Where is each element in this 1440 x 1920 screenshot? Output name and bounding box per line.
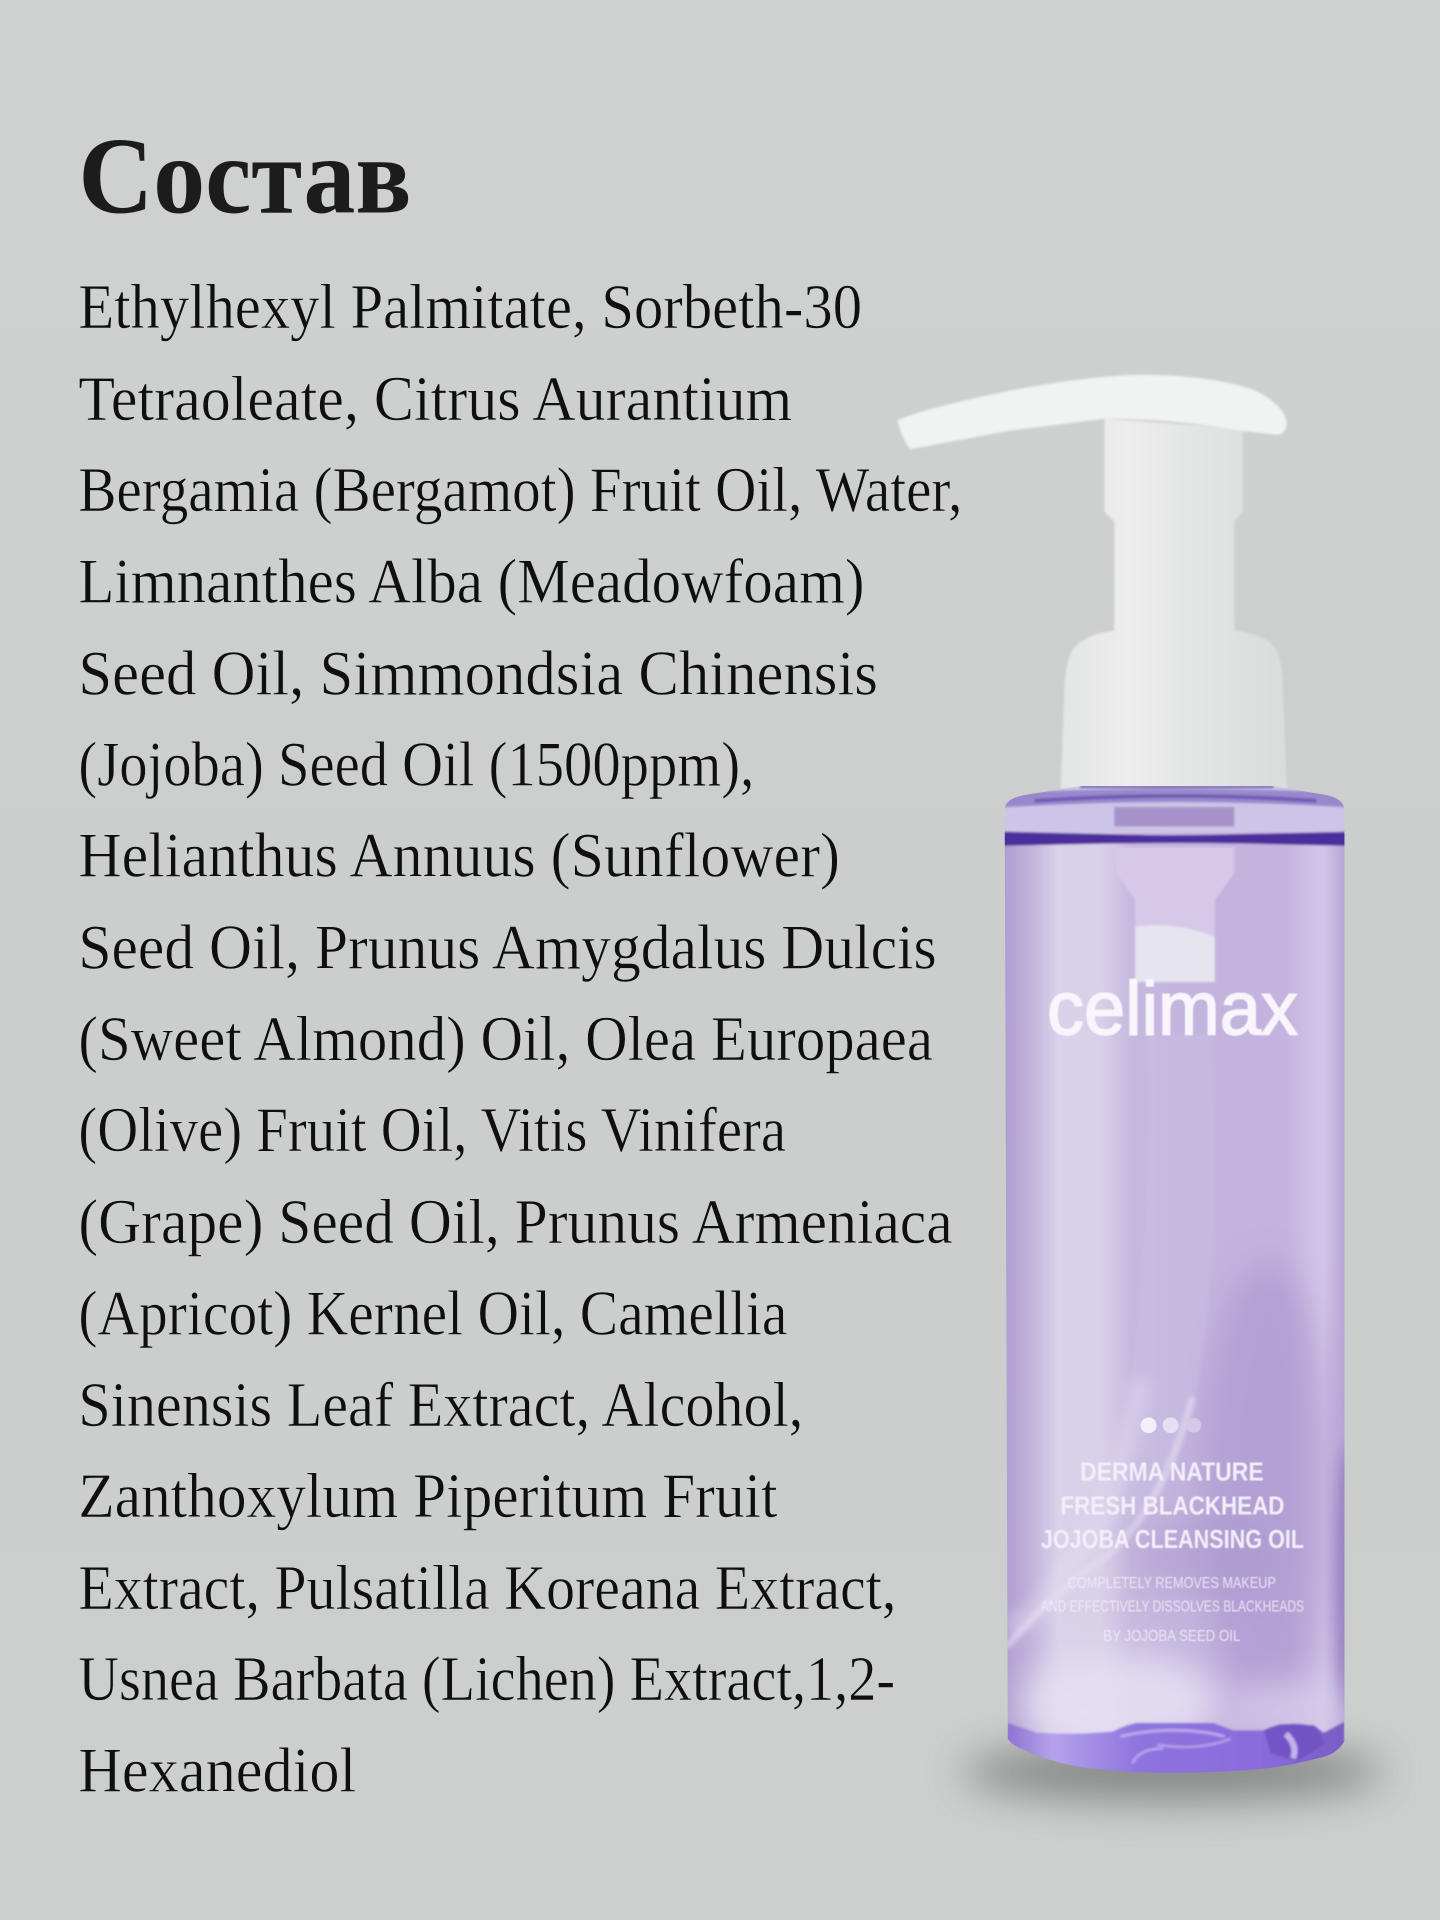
ingredients text block: (Olive) Fruit Oil, Vitis Vinifera: [78, 1094, 786, 1165]
base liquid: [1002, 1722, 1344, 1776]
label: product description: COMPLETELY REMOVES MAKEUP: [1068, 1575, 1276, 1592]
dark neck line: [992, 831, 1359, 846]
ingredients text block: Usnea Barbata (Lichen) Extract,1,2-: [78, 1643, 895, 1714]
label: product description: AND EFFECTIVELY DISSOLVES BLACKHEADS: [1041, 1598, 1304, 1615]
ingredients text block: (Apricot) Kernel Oil, Camellia: [78, 1278, 787, 1349]
label: product name: FRESH BLACKHEAD: [1060, 1493, 1284, 1521]
ingredients text block: Zanthoxylum Piperitum Fruit: [78, 1460, 778, 1531]
title: Состав: [78, 115, 411, 236]
pump head: [898, 375, 1287, 789]
dip tube inside the liquid: [1065, 1035, 1214, 1549]
dip tube collar: [1114, 847, 1234, 982]
label: product description: BY JOJOBA SEED OIL: [1103, 1628, 1241, 1645]
ingredients text block: (Sweet Almond) Oil, Olea Europaea: [78, 1003, 933, 1074]
label: product description: [1041, 1575, 1304, 1645]
lower body shading: [1200, 1261, 1335, 1727]
ingredients text block: Ethylhexyl Palmitate, Sorbeth-30: [78, 271, 862, 342]
ingredients text block: Hexanediol: [78, 1734, 356, 1805]
ingredients text block: Seed Oil, Simmondsia Chinensis: [78, 637, 878, 708]
ingredients text block: Helianthus Annuus (Sunflower): [78, 820, 840, 891]
ingredients text block: (Jojoba) Seed Oil (1500ppm),: [78, 729, 754, 800]
label: celimax logo: celimax: [1047, 967, 1298, 1052]
ingredients text block: Tetraoleate, Citrus Aurantium: [78, 363, 792, 434]
bottle shadow: [962, 1742, 1384, 1801]
label: product name: DERMA NATURE: [1080, 1458, 1264, 1486]
label: three dots: [1141, 1417, 1201, 1433]
ingredients text block: Limnanthes Alba (Meadowfoam): [78, 545, 864, 616]
ingredients text block: Extract, Pulsatilla Koreana Extract,: [78, 1552, 896, 1623]
label: product name: [1041, 1458, 1304, 1554]
ingredients text block: [78, 271, 962, 1805]
shoulder band: [1004, 786, 1344, 834]
label: product name: JOJOBA CLEANSING OIL: [1041, 1526, 1304, 1554]
liquid swirl: [1007, 1397, 1193, 1647]
ingredients text block: Bergamia (Bergamot) Fruit Oil, Water,: [78, 454, 962, 525]
ingredients text block: Sinensis Leaf Extract, Alcohol,: [78, 1369, 803, 1440]
bottle body: [1004, 786, 1344, 1773]
ingredients text block: Seed Oil, Prunus Amygdalus Dulcis: [78, 912, 937, 983]
product: cleansing oil bottle: [898, 375, 1384, 1801]
ingredients text block: (Grape) Seed Oil, Prunus Armeniaca: [78, 1186, 953, 1257]
